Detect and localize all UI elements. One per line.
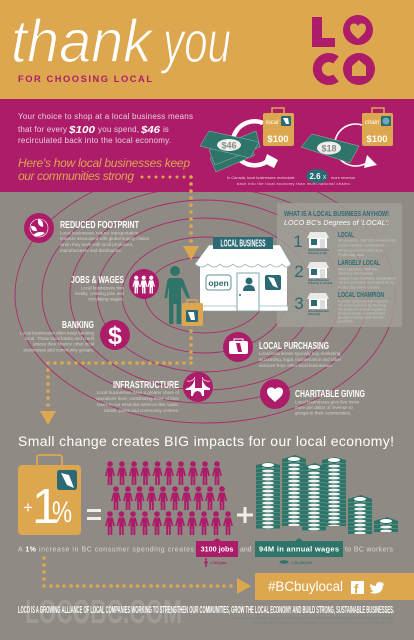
intro paragraph: $100 <box>68 124 95 136</box>
item: jobs and wages: Local businesses hire <box>81 286 124 290</box>
item: banking: unions then finance other local <box>33 342 94 346</box>
chain money loop <box>301 124 377 168</box>
intro paragraph: recirculated back into the local economy. <box>18 136 171 145</box>
degree 2: Largely local charitable contributions <box>338 276 396 280</box>
dotted arrow to hashtag <box>42 556 251 594</box>
chain money loop: $18 <box>321 144 337 154</box>
item: jobs and wages: locally, creating jobs and <box>75 291 124 296</box>
item: banking: $ <box>108 322 122 350</box>
intro paragraph <box>18 112 193 145</box>
shopping bag: +1% <box>18 455 81 535</box>
item: jobs and wages: circulating wages. <box>88 296 124 302</box>
header band <box>0 0 414 99</box>
degree 2: Service providers centralized at HQ <box>338 280 395 284</box>
legend: money: = $1,000,000 <box>292 561 312 565</box>
degree 2: 2 <box>294 262 304 281</box>
impact heading: Small change creates BIG impacts for our local economy! <box>18 433 394 449</box>
local shopping bag: $100 <box>267 134 289 145</box>
3100 jobs highlight: 3100 jobs <box>201 544 233 554</box>
item: banking: businesses and community groups. <box>23 348 94 352</box>
item: charitable giving <box>260 379 365 416</box>
concentric ripple rings <box>15 167 395 423</box>
panel subheading: LOCO BC's Degrees of 'LOCAL': <box>284 220 389 227</box>
item: jobs and wages <box>71 269 159 302</box>
intro paragraph: that for every <box>18 125 67 134</box>
local money loop: $46 <box>221 140 237 150</box>
degree 2: owners in BC/Canada <box>338 272 373 276</box>
item: infrastructure: Local businesses have a greater share of <box>97 390 180 395</box>
shopping bag: +1%: % <box>52 496 72 529</box>
shopping bag: +1%: 1 <box>32 480 59 534</box>
plus sign <box>237 507 253 523</box>
title: thank you: you <box>160 10 231 75</box>
item: reduced footprint: Local businesses reduce transportation <box>60 230 139 236</box>
item: reduced footprint: manufacturers and distributors. <box>60 248 122 253</box>
sign <box>213 237 273 249</box>
item: local purchasing: LOCAL PURCHASING <box>259 341 329 352</box>
item: banking: Local businesses often keep banking <box>20 330 94 336</box>
intro paragraph: you spend, <box>98 125 139 134</box>
intro paragraph: is <box>163 125 169 134</box>
logo: LOCO <box>312 15 375 85</box>
degree 2 <box>294 260 396 290</box>
item: local purchasing: accounting, legal, maintenance and other <box>259 357 342 362</box>
degree 1: Owned/Operated <box>308 248 329 252</box>
store: LOCAL BUSINESS <box>220 238 266 250</box>
website watermark: LOCOBC.COM <box>25 593 182 630</box>
degree 3: goods) or using local service <box>338 316 384 320</box>
chain shopping bag: $100 <box>366 134 388 145</box>
hashtag banner: #BCbuylocal <box>268 579 343 594</box>
item: charitable giving: groups in their communities. <box>295 410 351 416</box>
local money loop <box>200 121 278 172</box>
degree 3 <box>294 292 388 324</box>
degree 1: LOCAL <box>338 232 354 239</box>
degree 3: 3 <box>294 294 304 313</box>
degree 1: Local charitable contributions <box>338 244 385 248</box>
item: local purchasing: services from other local businesses. <box>259 363 333 368</box>
degree 1: Service providers often local <box>338 248 383 252</box>
equals sign <box>87 509 101 520</box>
impact sentence: A 1% increase in BC consumer spending creates <box>18 546 195 554</box>
item: infrastructure: INFRASTRUCTURE <box>113 380 179 391</box>
2.6x callout: more revenue <box>331 175 355 180</box>
degree 3: the products of local suppliers <box>338 308 386 312</box>
money stacks <box>256 455 398 534</box>
intro paragraph: Your choice to shop at a local business means <box>18 112 193 121</box>
people pictogram <box>105 461 233 535</box>
3100 jobs highlight <box>196 538 238 557</box>
store: open <box>208 278 229 288</box>
2.6x callout <box>227 169 355 186</box>
icon: facebook: f <box>354 582 359 596</box>
degree 2: Owned/Operated <box>308 278 329 282</box>
local shopping bag: local <box>266 120 279 126</box>
subheading: Here's how local businesses keep <box>18 156 190 170</box>
title: thank you: thank <box>11 8 155 75</box>
degree 2: Profits stay within Canada <box>338 286 380 290</box>
subheading <box>18 156 190 183</box>
door <box>237 273 259 311</box>
item: reduced footprint <box>24 213 150 253</box>
sources: "Independent BC: Small Business and the British Columbia Economy" (Civic Economics), February 2013 <box>251 620 394 624</box>
chain shopping bag <box>362 108 393 146</box>
icon: twitter <box>370 582 384 594</box>
degree 3: A public company that supports <box>338 300 388 304</box>
impact sentence: to BC workers <box>345 546 394 554</box>
dotted path: store to infrastructure <box>40 329 193 425</box>
awning <box>195 245 291 267</box>
legend: money <box>280 560 312 565</box>
item: reduced footprint: when they work with local producers, <box>60 242 134 247</box>
legend: jobs <box>204 558 227 567</box>
item: charitable giving: more per dollar of revenue to <box>295 405 353 410</box>
store <box>195 237 291 311</box>
impact sentence <box>18 538 394 557</box>
intro paragraph: $46 <box>140 124 160 136</box>
item: infrastructure: operations here, contributing more of their <box>95 396 180 401</box>
legend: jobs: = 100 jobs <box>210 561 227 565</box>
magenta intro band <box>0 99 414 192</box>
dotted path: intro to store <box>140 175 199 260</box>
item: reduced footprint: impacts associated with global supply chains <box>60 236 150 241</box>
2.6x callout: X <box>323 175 327 181</box>
degree 1: Profits stay local <box>338 253 364 257</box>
item: jobs and wages: JOBS & WAGES <box>71 275 124 286</box>
title: thank you <box>11 8 231 75</box>
item: local purchasing <box>223 332 342 368</box>
degree 1: 1 <box>293 232 303 251</box>
BC badge <box>265 275 281 290</box>
2.6x callout: back into the local economy than multi-national chains. <box>237 181 351 186</box>
hashtag banner <box>255 573 414 600</box>
degree 1: All operators, staff and owners in BC <box>338 238 397 242</box>
degree 2: LARGELY LOCAL <box>338 260 381 267</box>
local shopping bag <box>263 108 294 146</box>
item: infrastructure <box>95 372 213 413</box>
degree 3: the local economy by stocking <box>338 304 386 308</box>
degree 3: providers <box>338 320 353 324</box>
item: banking <box>20 320 130 352</box>
degree 3: Owned/Operated <box>308 309 329 313</box>
item: charitable giving: CHARITABLE GIVING <box>295 389 365 400</box>
2.6x callout: 2.6 <box>309 172 321 181</box>
degree 3: LOCAL CHAMPION <box>338 292 384 299</box>
item: infrastructure: taxes to our essential services like roads, <box>97 402 179 407</box>
impact sentence: and <box>240 546 252 554</box>
sources <box>233 616 394 624</box>
person with bag <box>164 266 203 326</box>
degree 1: Primarily in BC <box>308 251 327 255</box>
item: banking: BANKING <box>62 320 94 331</box>
item: local purchasing: Local businesses typically buy marketing, <box>259 351 342 356</box>
open sign <box>206 275 231 290</box>
degree 1 <box>293 232 397 257</box>
2.6x callout: In Canada, local businesses recirculate <box>227 175 295 180</box>
item: reduced footprint: REDUCED FOOTPRINT <box>60 220 139 231</box>
degree 3: (food products, manufactured <box>338 312 385 316</box>
subtitle: FOR CHOOSING LOCAL <box>18 74 152 84</box>
item: banking: local. Those local banks and credit <box>25 336 95 341</box>
shopping bag: +1%: + <box>23 498 33 517</box>
subheading: our communities strong <box>18 169 134 183</box>
degree 3: Publically <box>308 312 321 316</box>
icon: facebook <box>351 581 364 596</box>
panel: what is a local business <box>277 203 402 327</box>
item: infrastructure: transit, parks and community centres. <box>104 408 179 413</box>
sources: CANADIAN SOURCES: "The Power of Purchasing" LOCO, Columbia Institute, Beedie School of Business, May 2013 <box>233 616 394 620</box>
94M wages highlight <box>255 538 343 557</box>
94M wages highlight: 94M in annual wages <box>259 544 339 554</box>
chain shopping bag: chain <box>365 120 380 126</box>
item: charitable giving: Local businesses give five times <box>295 400 360 404</box>
degree 2: Primarily in Canada <box>308 281 333 285</box>
degree 2: Most operators, staff and <box>338 268 378 272</box>
